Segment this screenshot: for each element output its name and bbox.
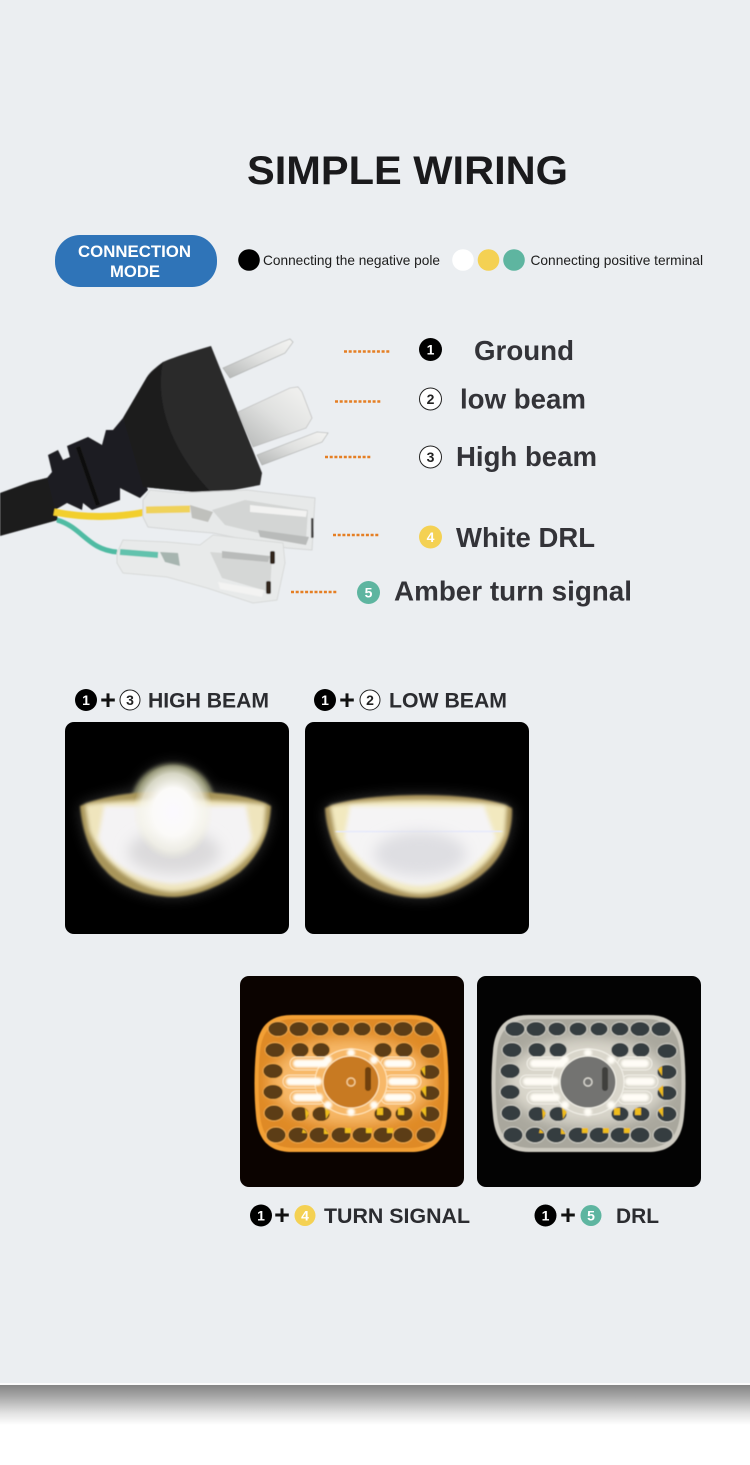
caption: DRL: DRL — [616, 1205, 659, 1228]
caption: low beam: LOW BEAM — [389, 690, 507, 712]
caption: low beam: 2 — [366, 692, 374, 708]
icon: green wire — [57, 520, 117, 552]
bottom shadow band — [0, 1383, 750, 1425]
pointer 3 — [325, 456, 372, 458]
icon: upper clear terminal — [143, 490, 315, 550]
caption: low beam — [314, 685, 507, 715]
label: high beam: 3 — [427, 449, 435, 465]
icon: middle blade — [238, 387, 312, 447]
label: amber turn signal: Amber turn signal — [394, 576, 632, 606]
connection mode badge: CONNECTION — [78, 243, 191, 261]
caption: DRL: 5 — [587, 1208, 595, 1224]
label: ground: 1 — [427, 342, 435, 358]
pointer 5 — [291, 591, 337, 593]
label: white DRL: White DRL — [456, 522, 595, 553]
panel: DRL lamp — [477, 976, 701, 1187]
icon: lower blade — [257, 432, 328, 465]
caption: low beam: 1 — [321, 692, 329, 708]
label: ground — [419, 335, 574, 366]
legend: positive terminal — [452, 249, 703, 271]
caption: high beam — [75, 685, 269, 715]
icon: cable — [0, 477, 58, 536]
icon: lower clear terminal — [117, 535, 285, 603]
H4 connector photo — [0, 339, 328, 603]
icon: strain relief — [47, 418, 148, 510]
panel: low beam light pattern — [305, 722, 529, 934]
pointer 2 — [335, 400, 381, 403]
caption: turn signal: 4 — [301, 1208, 309, 1224]
caption: DRL: + — [560, 1200, 576, 1230]
legend: negative pole — [238, 249, 440, 271]
caption: DRL — [534, 1200, 659, 1230]
caption: DRL: 1 — [542, 1208, 550, 1224]
label: ground: Ground — [474, 335, 574, 366]
caption: high beam: + — [100, 685, 116, 715]
caption: high beam: HIGH BEAM — [148, 690, 269, 712]
label: high beam: High beam — [456, 441, 597, 472]
legend: negative pole: Connecting the negative pole — [263, 252, 440, 268]
caption: turn signal: 1 — [257, 1208, 265, 1224]
icon: top blade — [223, 339, 293, 378]
label: low beam: low beam — [460, 384, 586, 414]
label: white DRL: 4 — [427, 529, 435, 545]
caption: low beam: + — [339, 685, 355, 715]
label: amber turn signal: 5 — [365, 584, 373, 600]
caption: turn signal — [250, 1200, 470, 1230]
caption: high beam: 3 — [126, 692, 134, 708]
panel: turn signal lamp — [240, 976, 464, 1187]
caption: turn signal: + — [274, 1200, 290, 1230]
title: SIMPLE WIRING — [247, 149, 568, 193]
pointer 4 — [333, 534, 379, 536]
panel: high beam light pattern — [65, 722, 289, 934]
legend: positive terminal: Connecting positive terminal — [530, 252, 703, 268]
label: low beam: 2 — [427, 391, 435, 407]
pointer 1 — [344, 350, 390, 353]
connection mode badge — [55, 235, 217, 287]
connection mode badge: MODE — [110, 263, 160, 281]
icon: yellow wire — [54, 512, 146, 516]
caption: turn signal: TURN SIGNAL — [324, 1205, 470, 1228]
caption: high beam: 1 — [82, 692, 90, 708]
icon: plug body — [123, 346, 262, 494]
